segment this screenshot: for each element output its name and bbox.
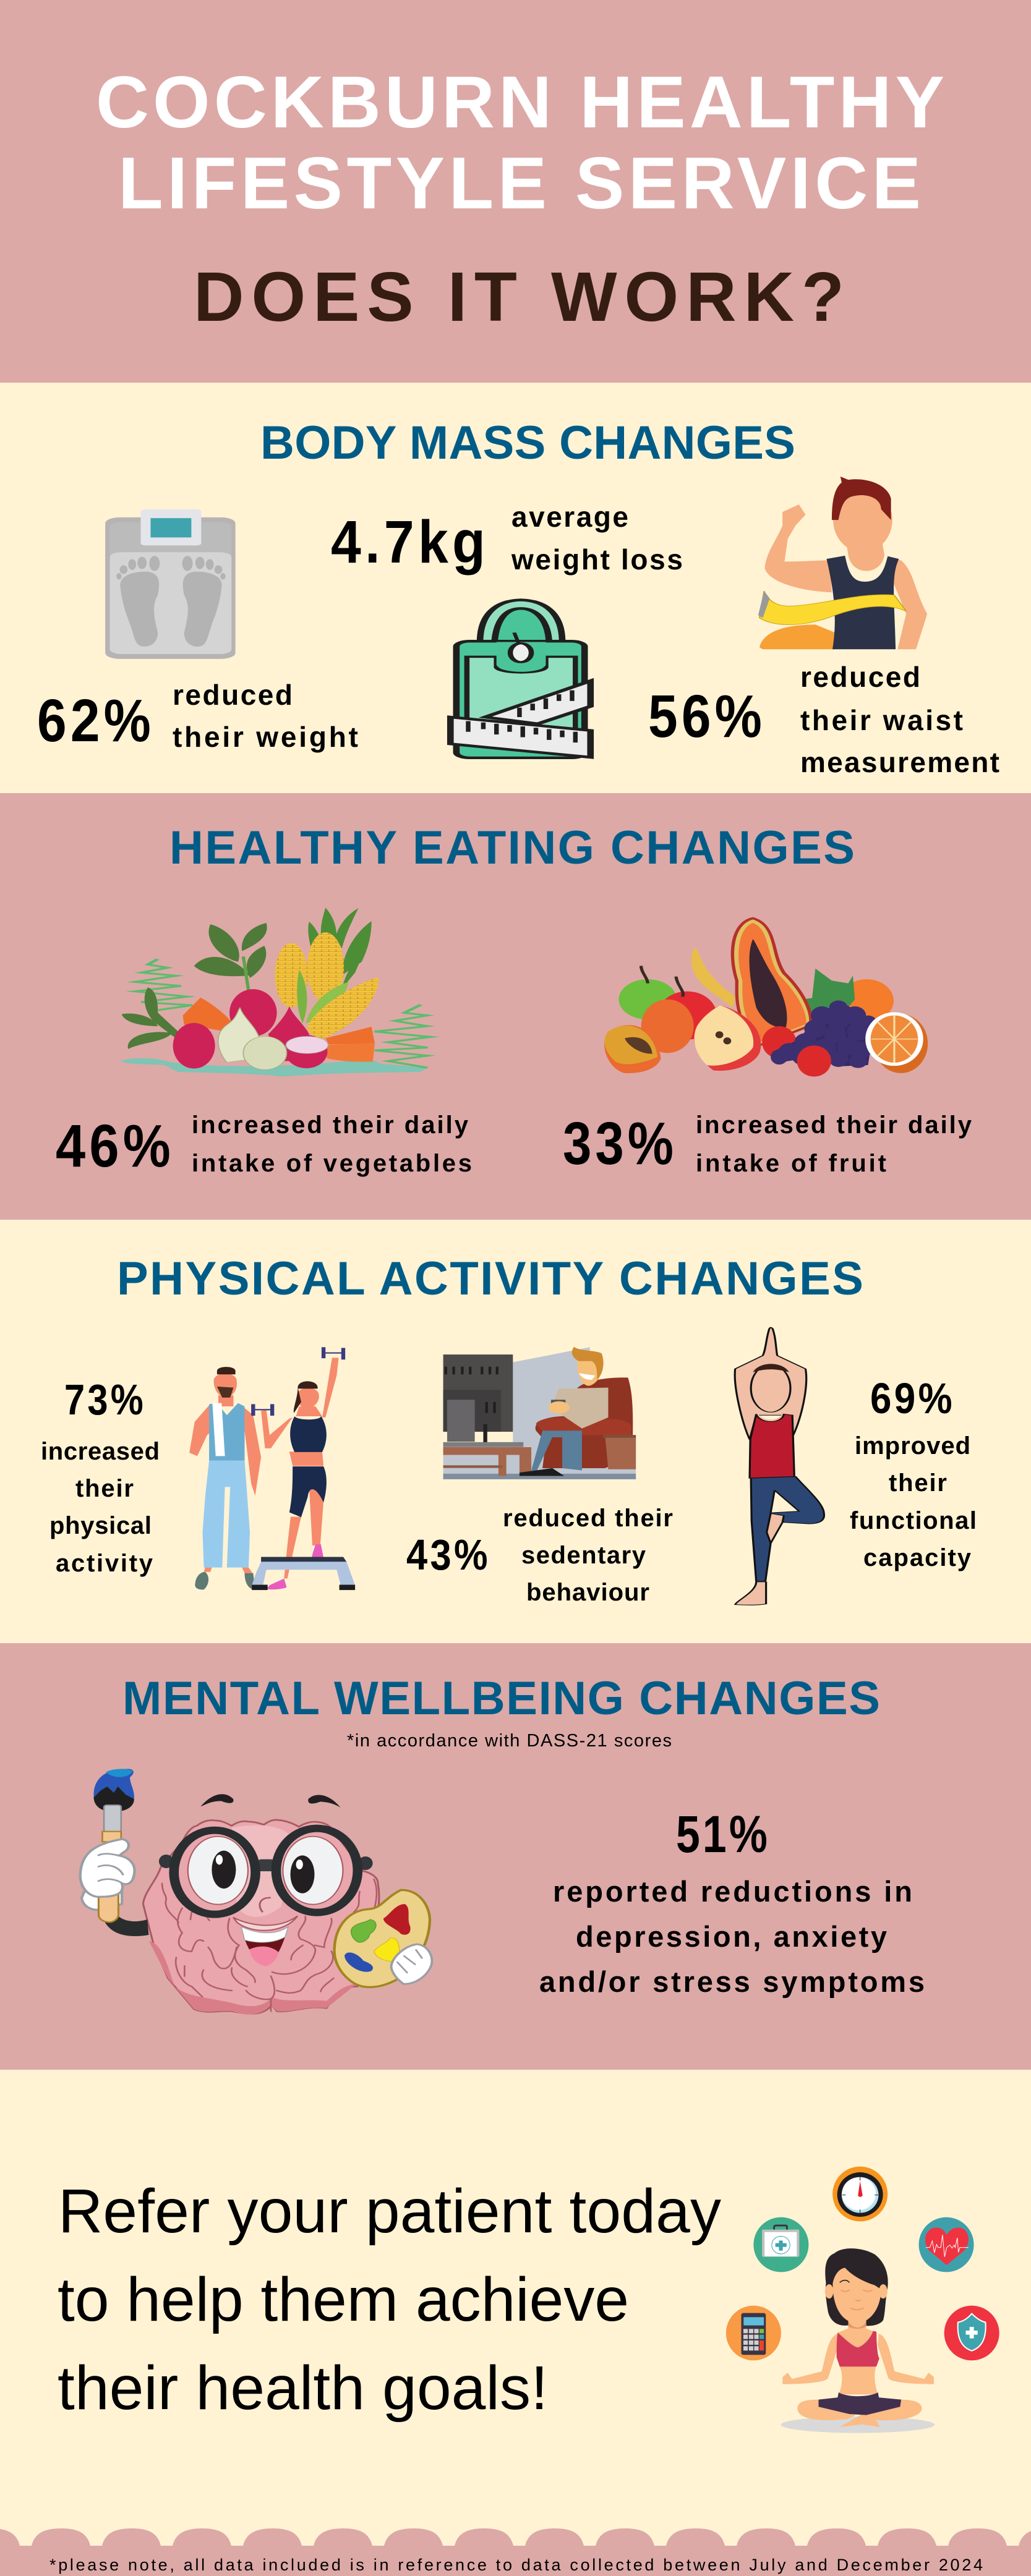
stat: vegetables: 46% <box>56 1112 174 1180</box>
stat: mental wellbeing: and/or stress symptoms <box>539 1965 925 1998</box>
heading: BODY MASS CHANGES <box>260 417 795 469</box>
stat: sedentary behaviour: reduced their <box>503 1505 673 1532</box>
icon: couple exercising <box>189 1347 355 1590</box>
icon: man in armchair watching tv <box>443 1347 636 1479</box>
stat: sedentary behaviour <box>406 1505 673 1606</box>
sub-icon: woman <box>252 1347 355 1590</box>
icon: fruit <box>604 917 928 1077</box>
stat: mental wellbeing: reported reductions in <box>553 1875 912 1908</box>
icon: heart rate <box>919 2217 974 2272</box>
panel: mental wellbeing changes <box>0 1643 1031 2070</box>
stat: fruit <box>563 1110 972 1177</box>
heading: MENTAL WELLBEING CHANGES <box>122 1672 880 1725</box>
sub-icon: face, glasses, brush, palette <box>80 1769 432 1987</box>
stat: sedentary behaviour: 43% <box>406 1531 490 1579</box>
panel: healthy eating changes <box>0 793 1031 1220</box>
icon: brain mascot <box>80 1769 432 2015</box>
stat: functional capacity: their <box>889 1469 947 1497</box>
stat: reduced their weight <box>37 679 358 754</box>
stat: average weight loss: weight loss <box>511 543 683 576</box>
title: LIFESTYLE SERVICE <box>118 142 921 224</box>
icon: bathroom scale <box>105 509 236 659</box>
stat: functional capacity: functional <box>850 1507 977 1534</box>
stat: reduced their waist measurement: their waist <box>800 704 963 736</box>
stat: mental wellbeing: depression, anxiety <box>576 1920 887 1953</box>
sub-icon: brain body <box>143 1820 379 2015</box>
stat: fruit: 33% <box>563 1110 677 1177</box>
stat: functional capacity <box>850 1374 977 1571</box>
icon: man measuring waist <box>758 477 927 649</box>
stat: functional capacity: 69% <box>870 1374 955 1422</box>
stat: physical activity <box>41 1375 160 1577</box>
stat: fruit: intake of fruit <box>696 1150 886 1177</box>
stat: reduced their weight: 62% <box>37 687 155 754</box>
heading: PHYSICAL ACTIVITY CHANGES <box>117 1252 863 1305</box>
call to action text: to help them achieve <box>58 2265 629 2334</box>
icon: yoga tree pose <box>735 1327 824 1605</box>
panel: physical activity changes <box>0 1220 1031 1643</box>
stat: functional capacity: capacity <box>863 1544 972 1571</box>
stat: average weight loss <box>331 501 683 576</box>
stat: physical activity: 73% <box>64 1375 146 1424</box>
stat: reduced their waist measurement <box>648 661 999 778</box>
stat: mental wellbeing <box>539 1805 925 1998</box>
icon: vegetables <box>121 908 430 1077</box>
call to action text: their health goals! <box>58 2353 548 2423</box>
stat: functional capacity: improved <box>855 1432 970 1460</box>
panel: call to action <box>0 2070 1031 2547</box>
panel: body mass changes <box>0 383 1031 793</box>
stat: physical activity: physical <box>49 1512 152 1539</box>
stat: average weight loss: 4.7kg <box>331 508 489 576</box>
panel: footnote band <box>0 2528 1031 2576</box>
title <box>96 61 944 224</box>
stat: fruit: increased their daily <box>696 1112 972 1139</box>
icon: medical kit <box>753 2217 808 2272</box>
footnote: *please note, all data included is in reference to data collected between July and December 2024 <box>49 2556 983 2574</box>
heading: HEALTHY EATING CHANGES <box>169 822 855 874</box>
call to action text <box>58 2177 721 2423</box>
stat: reduced their waist measurement: 56% <box>648 682 766 750</box>
stat: average weight loss: average <box>511 501 628 533</box>
stat: sedentary behaviour: sedentary <box>521 1542 646 1569</box>
stat: physical activity: their <box>75 1475 134 1502</box>
icon: clock <box>832 2167 888 2221</box>
stat: mental wellbeing: 51% <box>676 1805 770 1863</box>
note: DASS-21: *in accordance with DASS-21 scores <box>347 1731 672 1751</box>
stat: vegetables: increased their daily <box>192 1112 469 1139</box>
stat: reduced their waist measurement: reduced <box>800 661 920 693</box>
icon: calculator <box>726 2306 781 2360</box>
stat: physical activity: activity <box>56 1550 153 1577</box>
stat: vegetables <box>56 1112 472 1180</box>
sub-icon: woman <box>781 2248 935 2433</box>
title: COCKBURN HEALTHY <box>96 61 944 143</box>
subtitle: DOES IT WORK? <box>194 258 844 336</box>
stat: reduced their weight: reduced <box>173 679 293 711</box>
stat: reduced their waist measurement: measurement <box>800 746 999 778</box>
stat: vegetables: intake of vegetables <box>192 1150 472 1177</box>
icon: meditating woman <box>726 2167 999 2433</box>
icon: shield <box>944 2306 999 2360</box>
stat: sedentary behaviour: behaviour <box>526 1579 649 1606</box>
icon: green scale with tape <box>450 600 591 758</box>
stat: physical activity: increased <box>41 1438 160 1465</box>
panel: header <box>0 0 1031 383</box>
call to action text: Refer your patient today <box>58 2177 721 2246</box>
stat: reduced their weight: their weight <box>173 721 358 753</box>
